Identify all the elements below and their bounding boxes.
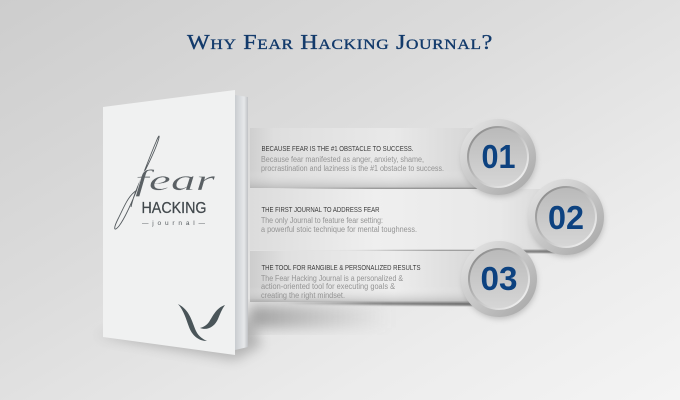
cover script lettering: fear: fear xyxy=(135,164,216,197)
text block: reason 1: BECAUSE FEAR IS THE #1 OBSTACLE TO SUCCESS. xyxy=(262,144,414,153)
cover wordmark: journal: —journal— xyxy=(142,220,206,227)
icon: feather V logo xyxy=(178,304,225,341)
badge 01: 01 xyxy=(482,138,516,175)
title: Why Fear Hacking Journal? xyxy=(187,30,493,54)
text block: reason 3: action-oriented tool for executing goals & xyxy=(261,282,396,291)
badge 03: 03 xyxy=(480,260,518,297)
text block: reason 2 xyxy=(261,205,417,234)
text block: reason 3: THE TOOL FOR RANGIBLE & PERSONALIZED RESULTS xyxy=(262,263,420,272)
panel: reasons xyxy=(250,119,604,328)
text block: reason 1: procrastination and laziness is the #1 obstacle to success. xyxy=(261,164,444,173)
book pages xyxy=(235,95,248,350)
panel: reason 2 band xyxy=(250,189,565,253)
badge 02 xyxy=(528,179,604,257)
text block: reason 2: a powerful stoic technique for mental toughness. xyxy=(261,225,417,234)
cover script lettering: fear xyxy=(115,136,216,229)
text block: reason 1 xyxy=(261,144,444,173)
panel: reason 3 band xyxy=(250,251,495,328)
text block: reason 2: THE FIRST JOURNAL TO ADDRESS FEAR xyxy=(262,205,380,214)
text block: reason 2: The only Journal to feature fear setting: xyxy=(261,216,383,225)
badge 02: 02 xyxy=(548,199,584,236)
book shadow xyxy=(96,318,262,360)
panel: reason 1 band xyxy=(250,128,495,192)
cover wordmark: HACKING: HACKING xyxy=(142,200,206,217)
text block: reason 3: creating the right mindset. xyxy=(261,291,345,300)
text block: reason 3: The Fear Hacking Journal is a personalized & xyxy=(261,274,404,283)
badge 03 xyxy=(461,241,537,319)
badge 01 xyxy=(460,119,536,197)
text block: reason 3 xyxy=(261,263,420,300)
book xyxy=(96,90,262,360)
book cover xyxy=(103,90,235,355)
text block: reason 1: Because fear manifested as anger, anxiety, shame, xyxy=(261,155,424,164)
